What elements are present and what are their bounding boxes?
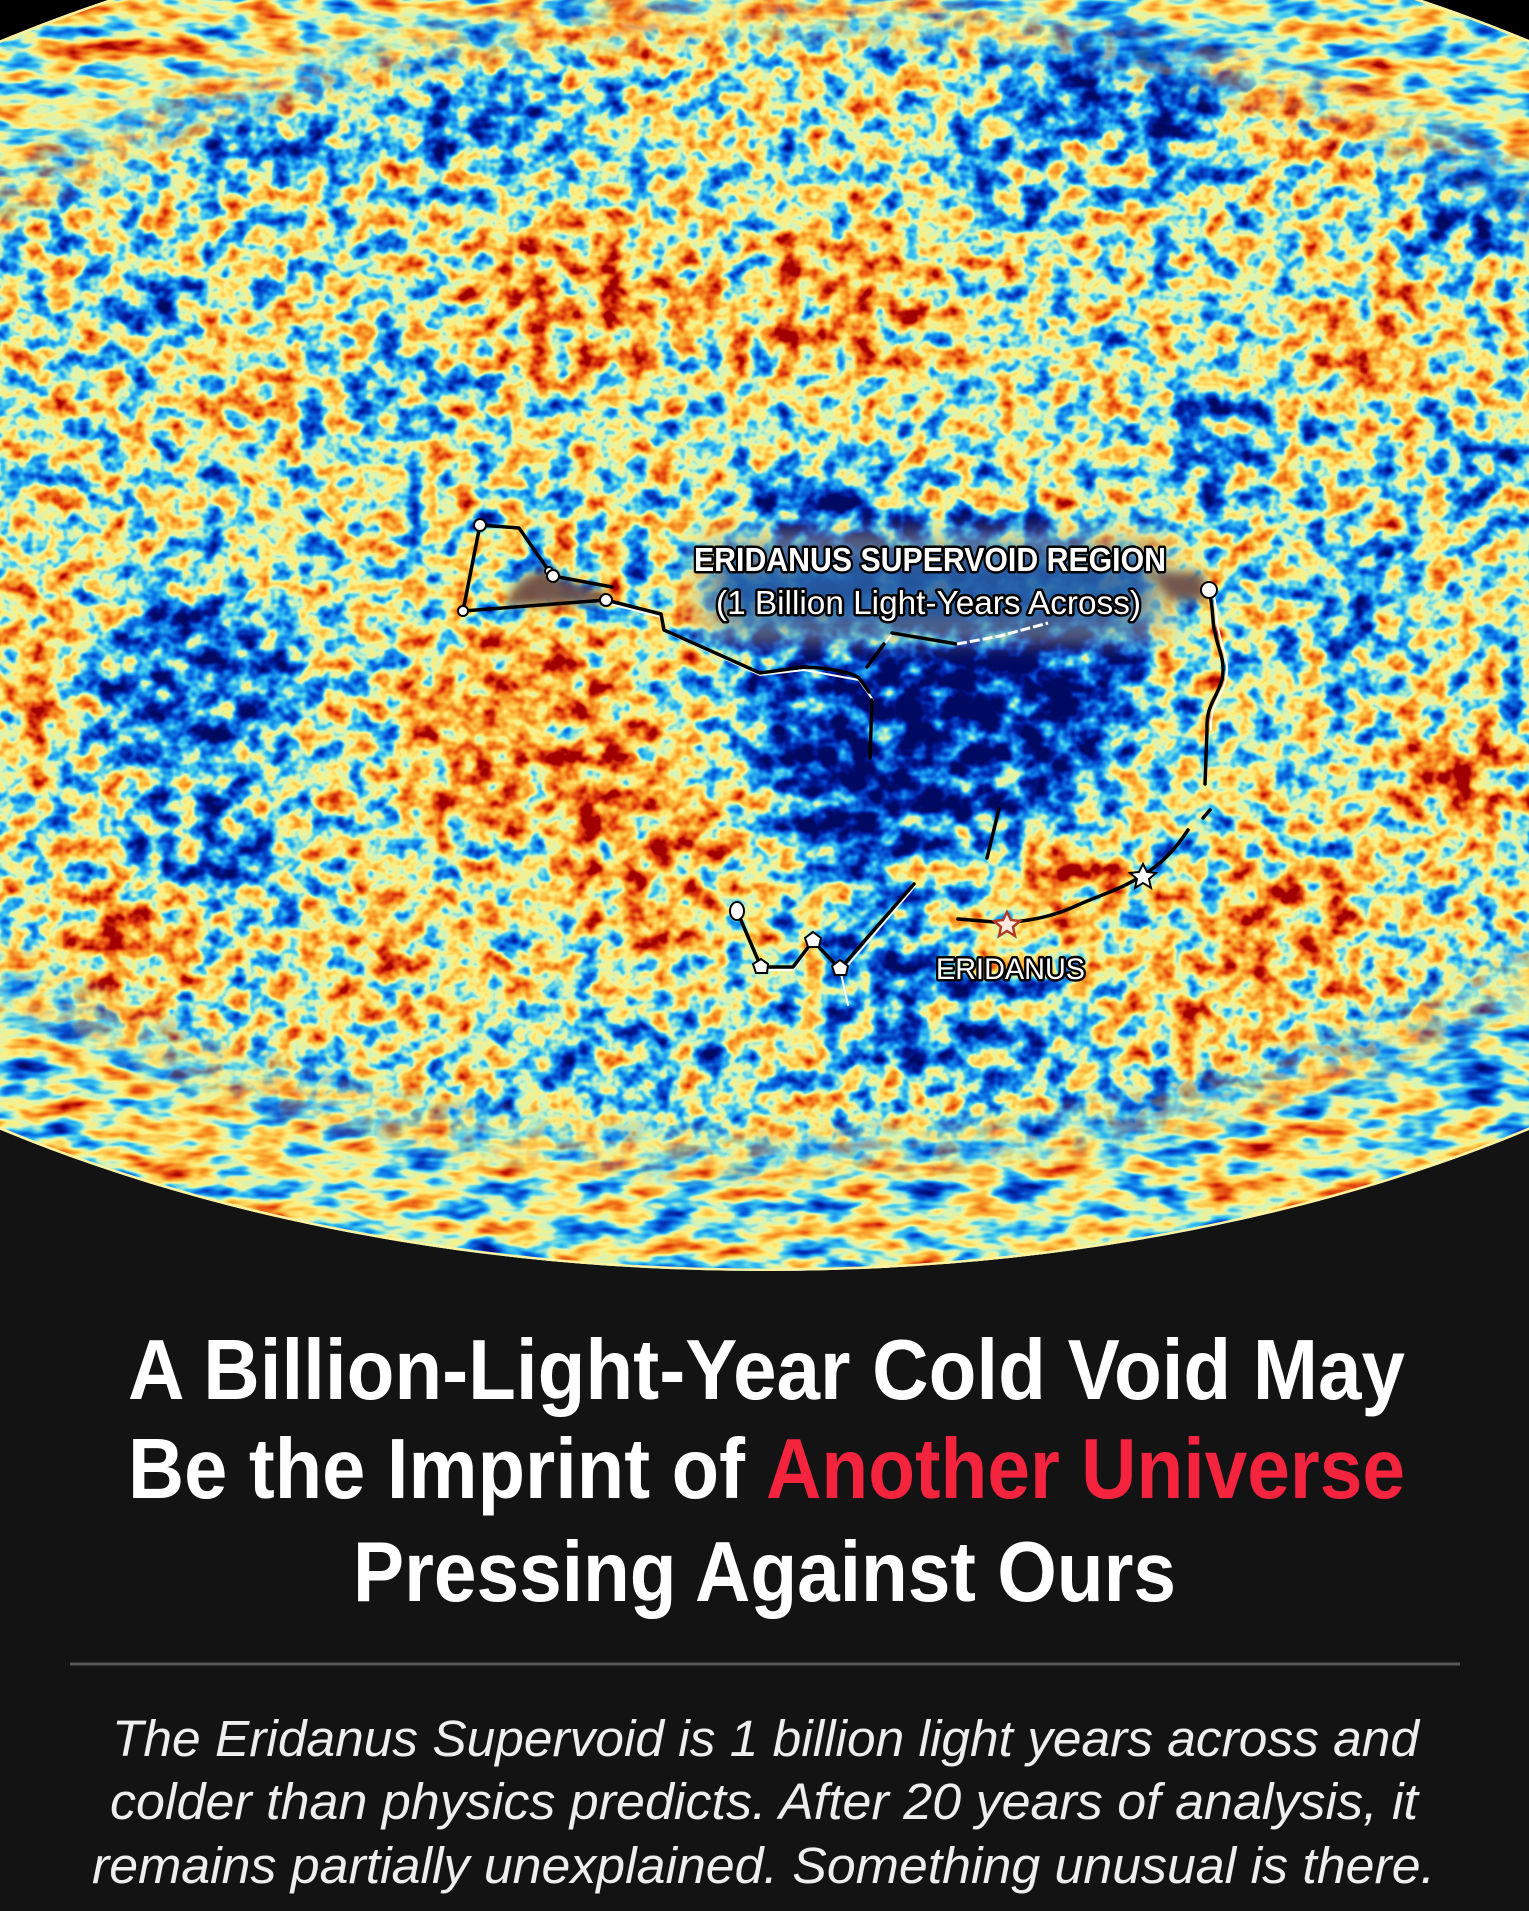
haze behind supervoid label [502, 532, 1206, 642]
divider [70, 1662, 1460, 1666]
title: Be the Imprint of [128, 1422, 746, 1517]
title [128, 1323, 1405, 1620]
constellation: right branch [958, 582, 1227, 936]
subtitle [92, 1710, 1435, 1894]
CMB sky map [0, 0, 1529, 1350]
constellation: upper left quadrilateral and river [458, 519, 1048, 758]
title: Pressing Against Ours [353, 1525, 1176, 1620]
subtitle: remains partially unexplained. Something unusual is there. [92, 1837, 1435, 1894]
title: Another Universe [766, 1422, 1405, 1517]
label: Eridanus Supervoid Region: ERIDANUS SUPERVOID REGION [694, 541, 1166, 578]
label: Eridanus: ERIDANUS [936, 953, 1085, 986]
label: 1 billion light-years across: (1 Billion Light-Years Across) [716, 584, 1141, 621]
title: A Billion-Light-Year Cold Void May [128, 1323, 1405, 1418]
constellation: lower branch [730, 884, 915, 1005]
subtitle: The Eridanus Supervoid is 1 billion light years across and [112, 1710, 1421, 1767]
subtitle: colder than physics predicts. After 20 years of analysis, it [110, 1773, 1420, 1830]
